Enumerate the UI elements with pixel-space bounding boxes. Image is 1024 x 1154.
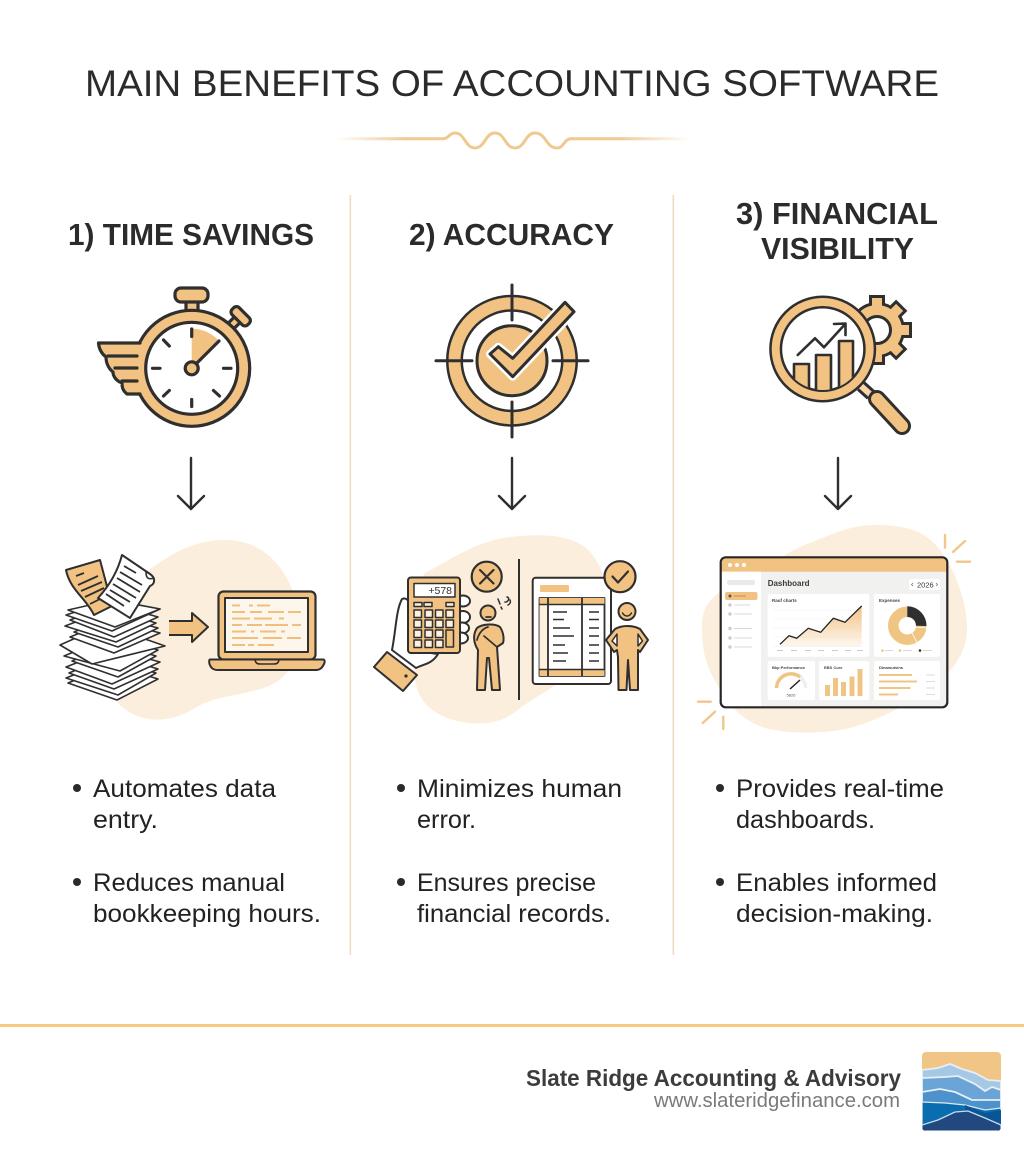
bullets: time savings: Reduces manual [93,869,285,897]
illustration: calculator error vs precise ledger [374,535,648,723]
card: performance gauge [768,661,815,700]
card: expenses donut: Expenses [879,598,901,603]
card: bar chart [819,661,869,700]
bullets: financial visibility: dashboards. [736,806,875,834]
card: horizontal bars [874,661,940,700]
icon: target with check mark [436,285,588,437]
card: bar chart: EBS Cure [824,665,843,670]
illustration: paper stack to laptop [60,540,325,720]
blob [412,535,607,723]
card: line chart: Rauf charts [772,598,797,603]
blob [702,525,967,733]
bullets: financial visibility: decision-making. [736,900,933,928]
bullets: accuracy [397,775,622,928]
card: expenses donut [874,594,940,657]
bullets: accuracy: error. [417,806,476,834]
sparkle lines top right [945,535,970,562]
dashboard heading: Dashboard [768,579,810,588]
laptop [209,592,325,670]
bullets: time savings: Automates data [93,775,276,803]
loose tan paper [66,560,112,615]
heading: financial visibility: VISIBILITY [761,231,914,266]
icon: winged stopwatch [98,288,252,426]
divider line [518,559,520,700]
title: MAIN BENEFITS OF ACCOUNTING SOFTWARE [85,63,939,104]
calculator display: +578 [428,585,452,597]
paper stack [60,600,165,700]
card: line chart [768,594,869,657]
blob [105,540,301,720]
dashboard window [721,557,947,707]
confused person [474,597,510,690]
confident person [606,603,648,690]
icon: check mark [604,561,636,592]
card: performance gauge: 5826 [787,692,796,698]
footer website: www.slateridgefinance.com [653,1090,900,1112]
year selector [909,579,940,590]
sidebar [725,580,758,649]
card: horizontal bars: Dinamutsins [879,665,904,670]
loose white paper [98,555,154,618]
heading: financial visibility: 3) FINANCIAL [736,196,938,231]
hand holding calculator [374,578,470,691]
calculator body [408,578,460,653]
transfer arrow [169,613,208,642]
bullets: time savings: bookkeeping hours. [93,900,321,928]
year selector: 2026 [917,580,934,590]
arrow: time savings [178,458,204,509]
heading: time savings: 1) TIME SAVINGS [68,217,314,252]
heading: accuracy: 2) ACCURACY [409,217,614,252]
bullets: time savings [73,775,321,928]
bullets: accuracy: Minimizes human [417,775,622,803]
footer company name: Slate Ridge Accounting & Advisory [526,1065,901,1091]
bullets: accuracy: financial records. [417,900,611,928]
ledger document [533,578,611,684]
bullets: accuracy: Ensures precise [417,869,596,897]
bullets: financial visibility: Enables informed [736,869,937,897]
icon: error mark [472,562,502,592]
card: performance gauge: Bkp Performance [772,665,806,670]
bullets: financial visibility: Provides real-time [736,775,944,803]
logo: layered mountains [922,1052,1001,1131]
bullets: financial visibility [716,775,944,928]
arrow: financial visibility [825,458,851,509]
illustration: dashboard [698,525,970,733]
heading: financial visibility [736,196,938,266]
bullets: time savings: entry. [93,806,158,834]
sparkle lines bottom left [698,702,723,729]
arrow: accuracy [499,458,525,509]
icon: magnifier with chart and gear [776,295,912,426]
